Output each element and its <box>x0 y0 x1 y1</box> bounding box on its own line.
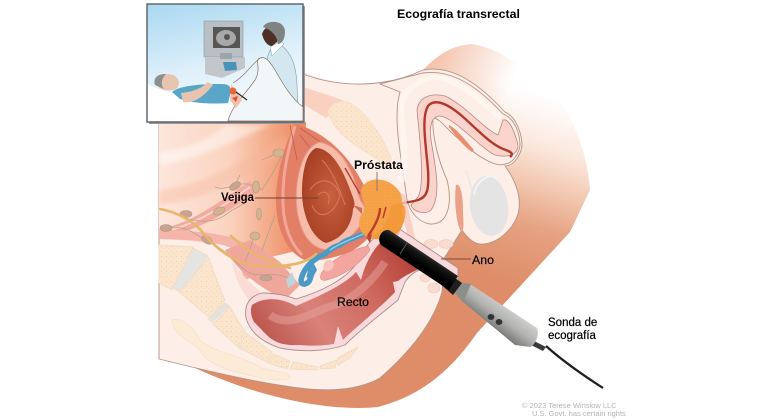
label: Recto: Recto <box>337 297 369 309</box>
rectum outer wall <box>246 226 458 351</box>
anal sphincter <box>420 240 453 293</box>
ultrasound probe <box>379 230 603 388</box>
copyright: U.S. Govt. has certain rights <box>532 409 626 418</box>
yellow ureter tubes <box>160 209 316 268</box>
patient <box>154 74 247 108</box>
perineal crease <box>455 185 464 232</box>
label: Ano: Ano <box>472 255 494 267</box>
label: Próstata: Próstata <box>354 160 404 172</box>
label: Sonda de ecografía: Sonda de <box>548 317 597 329</box>
label: Vejiga: Vejiga <box>221 192 255 204</box>
fat strip <box>172 320 290 380</box>
testicle <box>466 170 512 238</box>
doctor <box>262 22 298 112</box>
bladder <box>276 124 377 261</box>
patient raised legs and drape <box>228 58 303 121</box>
nerve network and lymph nodes <box>160 148 295 281</box>
body skin silhouette <box>160 44 590 408</box>
pelvic muscle wall <box>159 122 306 310</box>
seminal vesicle and vas deferens <box>286 233 370 288</box>
rectum lumen <box>251 243 420 346</box>
penis <box>380 72 520 224</box>
prostate <box>353 180 405 243</box>
label: Sonda de ecografía: ecografía <box>548 330 597 342</box>
inset panel: patient and doctor with ultrasound machine <box>147 4 305 124</box>
pubic bone <box>303 87 391 163</box>
copyright: © 2023 Terese Winslow LLC <box>522 401 617 410</box>
anal canal tissue <box>396 190 418 252</box>
ultrasound machine <box>204 21 245 78</box>
bed <box>148 84 240 121</box>
urethra <box>352 102 512 207</box>
sacrum and coccyx bones <box>159 245 358 370</box>
leader lines <box>255 172 471 259</box>
title: Ecografía transrectal <box>397 9 520 21</box>
body cross-section: cream tissue <box>159 69 522 390</box>
